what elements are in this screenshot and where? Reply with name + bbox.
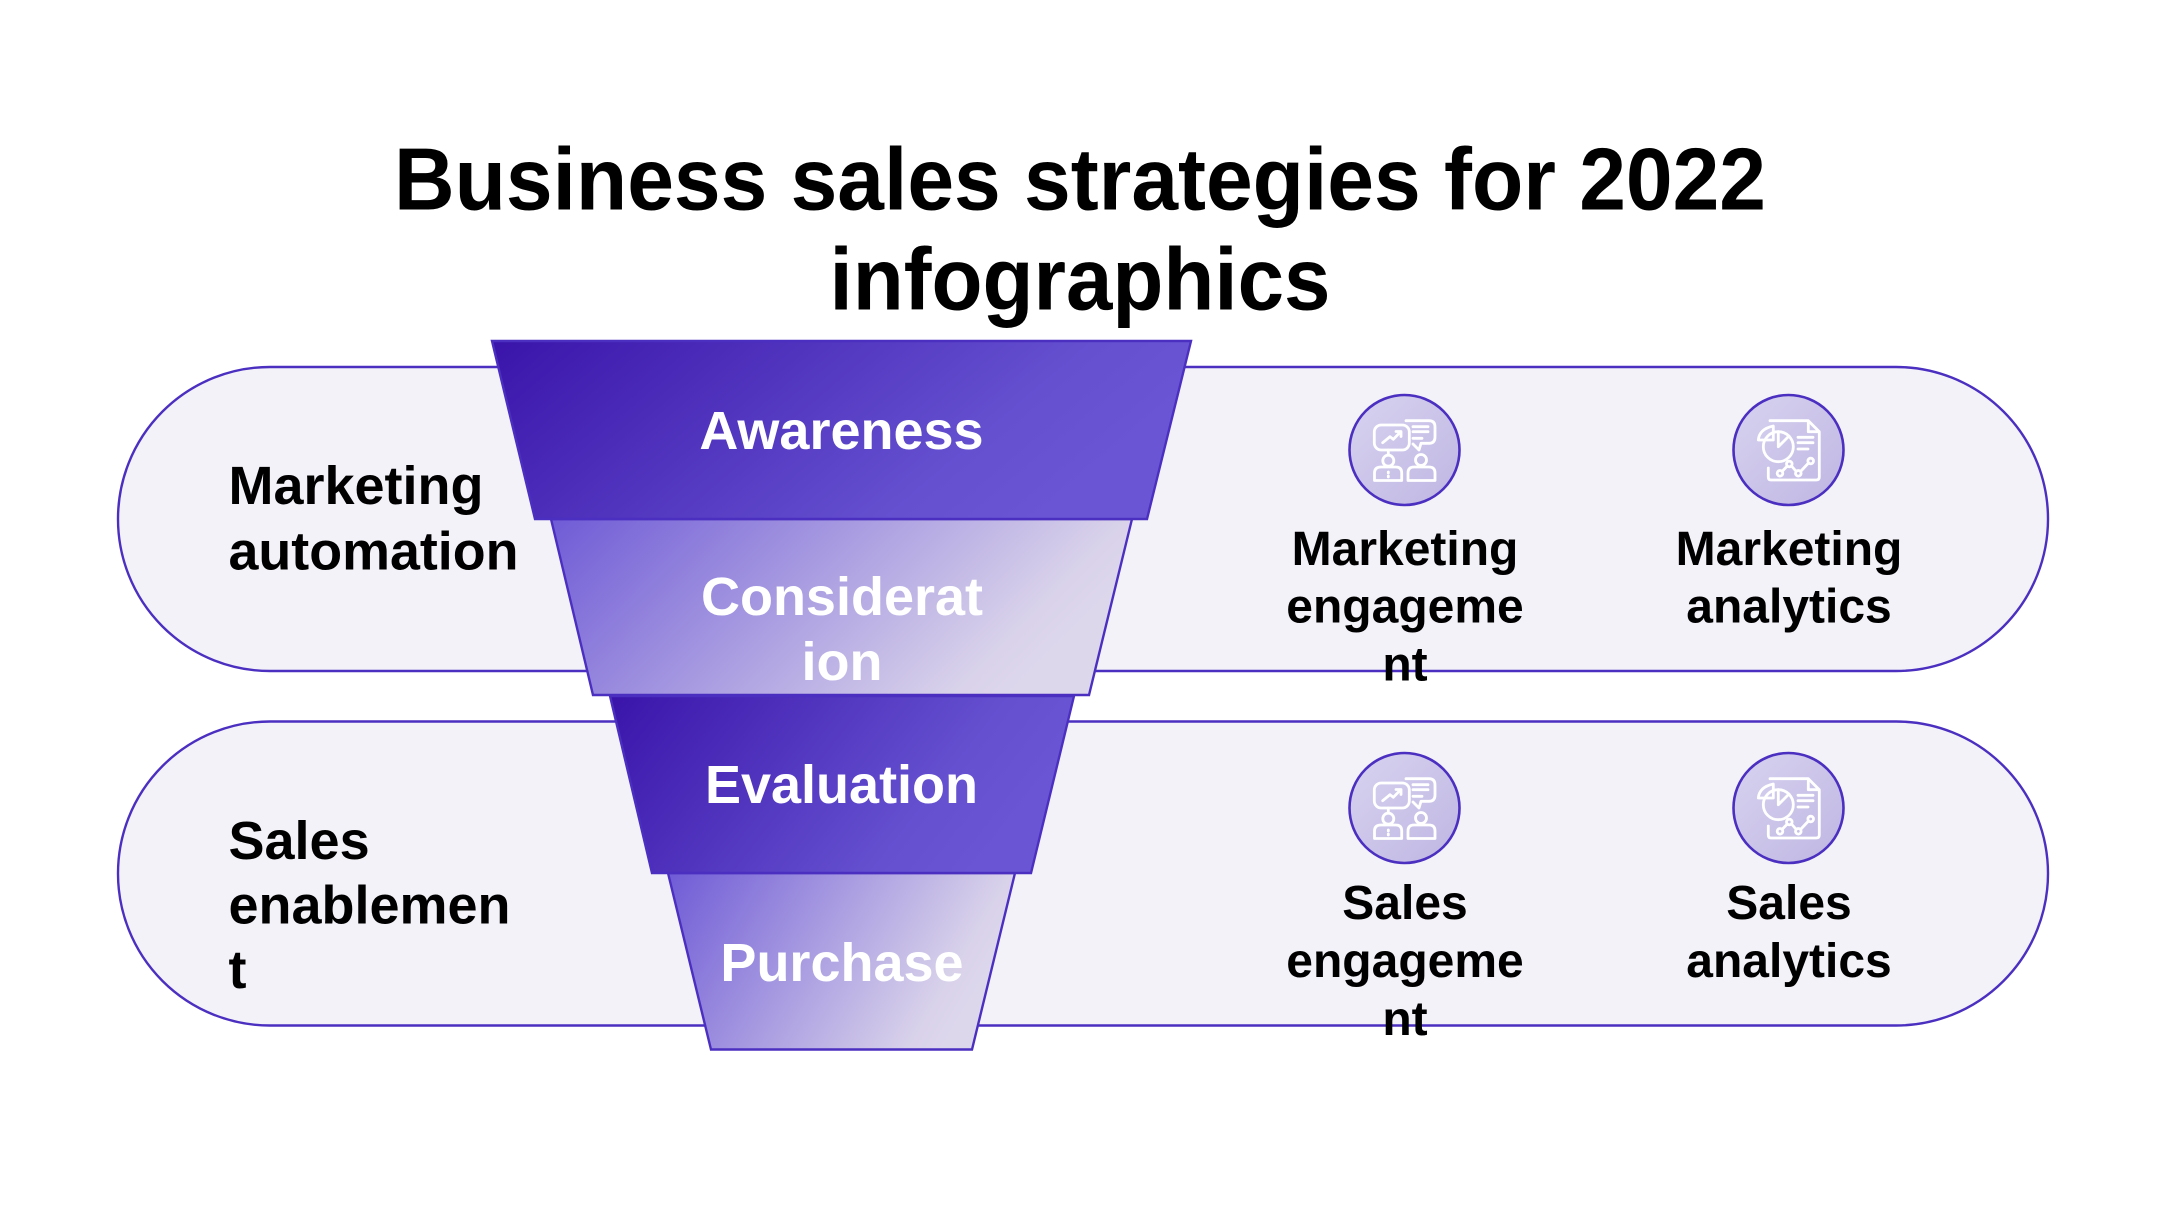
label: sales enablement: enablemen xyxy=(228,876,510,936)
panel: marketing row xyxy=(118,367,2048,671)
icon: marketing engagement xyxy=(1350,395,1460,505)
title: Business sales strategies for 2022 xyxy=(394,130,1766,228)
funnel stage: purchase xyxy=(668,873,1015,1050)
funnel stage: consideration: ion xyxy=(802,632,882,692)
funnel stage: evaluation xyxy=(610,696,1074,873)
panel: sales row xyxy=(118,722,2048,1026)
label: marketing engagement: Marketing xyxy=(1292,523,1518,576)
title: infographics xyxy=(830,230,1330,328)
label: marketing automation: Marketing xyxy=(228,456,484,516)
label: marketing analytics xyxy=(1676,523,1902,634)
icon: sales analytics xyxy=(1734,753,1844,863)
funnel stage: consideration: Considerat xyxy=(701,567,983,627)
funnel stage: awareness: Awareness xyxy=(699,401,984,461)
label: marketing analytics: Marketing xyxy=(1676,523,1902,576)
label: marketing automation xyxy=(228,456,518,582)
label: sales enablement xyxy=(228,811,510,1000)
label: sales analytics xyxy=(1686,877,1892,988)
title xyxy=(394,130,1766,328)
label: sales enablement: t xyxy=(228,940,246,1000)
funnel stage: purchase: Purchase xyxy=(720,933,964,993)
label: sales enablement: Sales xyxy=(228,811,370,871)
label: sales analytics: analytics xyxy=(1686,935,1892,988)
icon: marketing analytics xyxy=(1734,395,1844,505)
label: sales engagement: engageme xyxy=(1286,935,1524,988)
funnel stage: evaluation: Evaluation xyxy=(705,755,978,815)
label: marketing engagement: nt xyxy=(1382,638,1428,692)
label: sales engagement xyxy=(1286,877,1524,1046)
label: sales analytics: Sales xyxy=(1726,877,1852,930)
funnel stage: awareness xyxy=(492,341,1191,519)
icon: sales engagement xyxy=(1350,753,1460,863)
label: sales engagement: Sales xyxy=(1342,877,1468,930)
label: marketing engagement: engageme xyxy=(1286,580,1524,634)
label: sales engagement: nt xyxy=(1382,993,1428,1046)
label: marketing automation: automation xyxy=(228,522,518,582)
label: marketing engagement xyxy=(1286,523,1524,692)
funnel stage: consideration xyxy=(551,519,1132,695)
label: marketing analytics: analytics xyxy=(1686,580,1892,634)
funnel xyxy=(492,341,1191,1050)
